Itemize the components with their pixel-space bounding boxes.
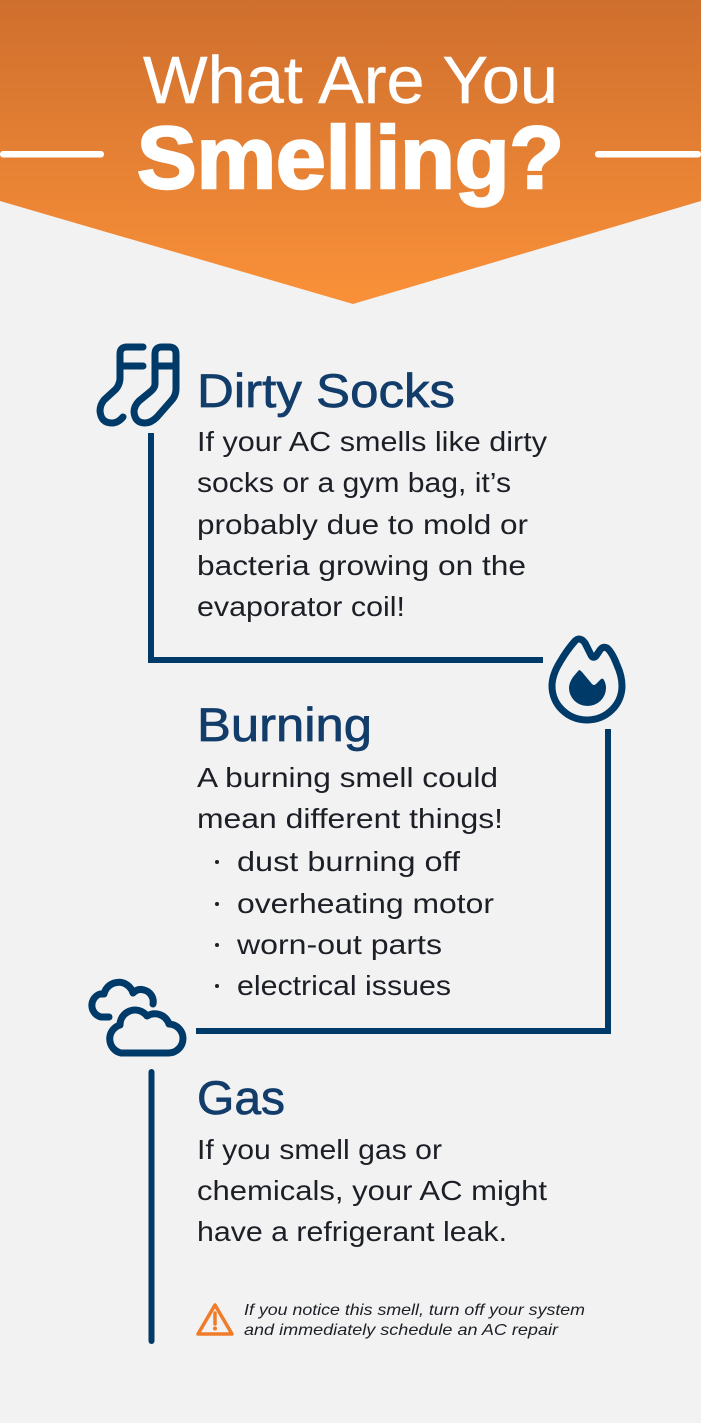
text block: A burning smell could	[197, 762, 498, 793]
heading: Gas	[197, 1071, 285, 1124]
heading: Burning	[197, 698, 372, 751]
bullet list: dust burning off	[237, 846, 460, 877]
callout: warning	[198, 1302, 585, 1339]
panel: burning	[197, 698, 503, 1001]
text block: socks or a gym bag, it’s	[197, 467, 511, 498]
header banner	[0, 0, 701, 304]
icon: warning triangle	[198, 1305, 232, 1334]
connector: flame to clouds	[196, 729, 608, 1031]
bullet list: worn-out parts	[236, 929, 442, 960]
connector: clouds to end	[148, 1072, 154, 1341]
panel: gas	[197, 1071, 547, 1247]
text block: mean different things!	[197, 803, 503, 834]
warning note: If you notice this smell, turn off your system	[244, 1302, 585, 1319]
text block	[197, 1134, 547, 1247]
panel: dirty socks	[197, 364, 547, 622]
icon: flame	[552, 639, 622, 720]
text block: evaporator coil!	[197, 591, 405, 622]
bullet list: electrical issues	[237, 970, 451, 1001]
connector: socks to flame	[151, 433, 543, 660]
text block	[197, 762, 503, 834]
text block: If you smell gas or	[197, 1134, 442, 1165]
bullet list	[215, 846, 494, 1001]
text block: probably due to mold or	[197, 509, 528, 540]
icon: clouds	[92, 982, 183, 1053]
text block	[197, 426, 547, 622]
text block: have a refrigerant leak.	[197, 1216, 507, 1247]
warning note	[244, 1302, 585, 1339]
text block: chemicals, your AC might	[197, 1175, 547, 1206]
text block: If your AC smells like dirty	[197, 426, 547, 457]
text block: bacteria growing on the	[197, 550, 526, 581]
icon: socks	[100, 347, 176, 423]
heading: Dirty Socks	[197, 364, 455, 417]
title: What Are You	[143, 43, 558, 118]
title: Smelling?	[137, 108, 564, 207]
bullet list: overheating motor	[237, 888, 494, 919]
title	[137, 43, 564, 207]
warning note: and immediately schedule an AC repair	[244, 1322, 559, 1339]
